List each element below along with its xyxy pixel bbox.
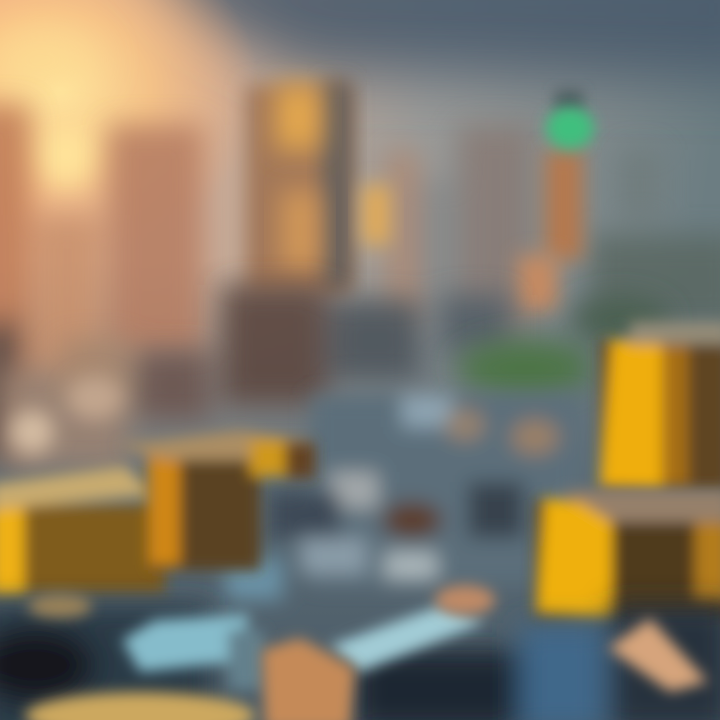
gold stack: left <box>0 466 165 595</box>
tall central tower <box>246 80 390 295</box>
midground buildings <box>0 285 510 470</box>
sun glow <box>0 0 260 260</box>
peach foreground blocks <box>28 585 708 720</box>
gold stack: lower right <box>535 490 720 620</box>
distant skyline <box>0 105 720 460</box>
blurred rooftops in the centre <box>10 376 580 600</box>
green park <box>457 298 670 396</box>
gold stack: upper right <box>600 322 720 490</box>
gold coin at bottom edge <box>25 692 255 720</box>
dark foreground blocks <box>0 605 720 720</box>
gold stack: centre left <box>118 430 315 570</box>
right tower with green top <box>518 90 594 310</box>
light blue foreground tiles <box>122 606 485 690</box>
